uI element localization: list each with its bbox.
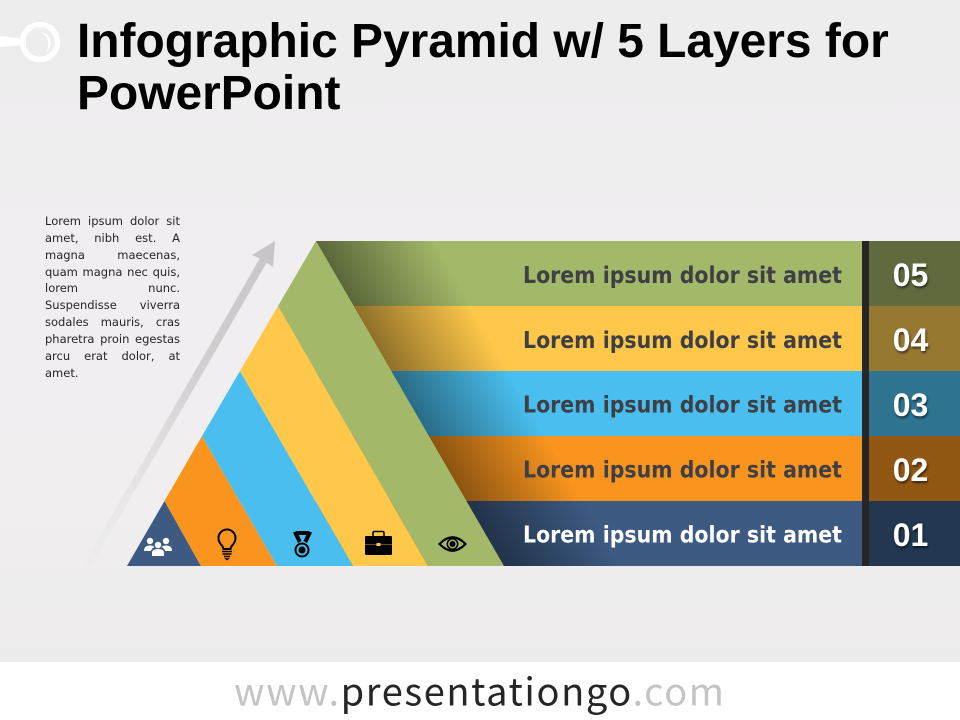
number 05: 05 [893,257,928,293]
number 04 [869,306,960,371]
icon: title ring marker [0,22,60,62]
icon: medal [293,531,312,556]
text block: description: quam magna nec quis, [45,265,180,279]
text block: description [45,214,180,380]
number 02 [869,436,960,501]
pyramid layer: yellow [240,306,428,566]
text block: description: amet, nibh est. A [45,231,180,245]
number 02: 02 [893,452,928,488]
band 03 [316,371,862,436]
band 01 [316,501,862,566]
title: PowerPoint [77,67,340,120]
band 05 [316,241,862,306]
label 04: Lorem ipsum dolor sit amet [523,326,842,354]
number 04: 04 [893,322,928,358]
number 03: 03 [893,387,928,423]
band labels [523,261,842,548]
number 05 [869,241,960,306]
text block: description: Lorem ipsum dolor sit [45,214,180,228]
title: Infographic Pyramid w/ 5 Layers for [77,15,889,68]
number 01: 01 [893,517,928,553]
footer url: www.presentationgo.com [234,662,724,716]
label 03: Lorem ipsum dolor sit amet [523,390,842,418]
pyramid layer: navy [127,501,201,566]
pyramid [127,241,504,566]
label 02: Lorem ipsum dolor sit amet [523,456,842,484]
shadow cast by pyramid [316,241,720,566]
title [77,15,889,120]
label 05: Lorem ipsum dolor sit amet [523,261,842,289]
icon: people [144,538,172,556]
arrow: rising diagonal [84,241,275,568]
pyramid layer: orange [164,436,277,566]
panel: number cells [869,241,960,566]
number 03 [869,371,960,436]
icon: eye [440,537,466,551]
text block: description: magna maecenas, [45,248,180,262]
text block: description: arcu erat dolor, at [45,349,180,363]
band 04 [316,306,862,371]
text block: description: pharetra proin egestas [45,332,180,346]
icon: briefcase [365,532,392,555]
band 02 [316,436,862,501]
text block: description: lorem nunc. [45,281,180,295]
pyramid layer: blue [202,371,353,566]
icon: light bulb [218,530,236,560]
pyramid layer: green [278,241,504,566]
text block: description: sodales mauris, cras [45,315,180,329]
number 01 [869,501,960,566]
divider bar [862,241,869,566]
text block: description: Suspendisse viverra [45,298,180,312]
panel: layer bands [316,241,862,566]
label 01: Lorem ipsum dolor sit amet [523,520,842,548]
footer band [0,662,960,720]
text block: description: amet. [45,366,78,380]
